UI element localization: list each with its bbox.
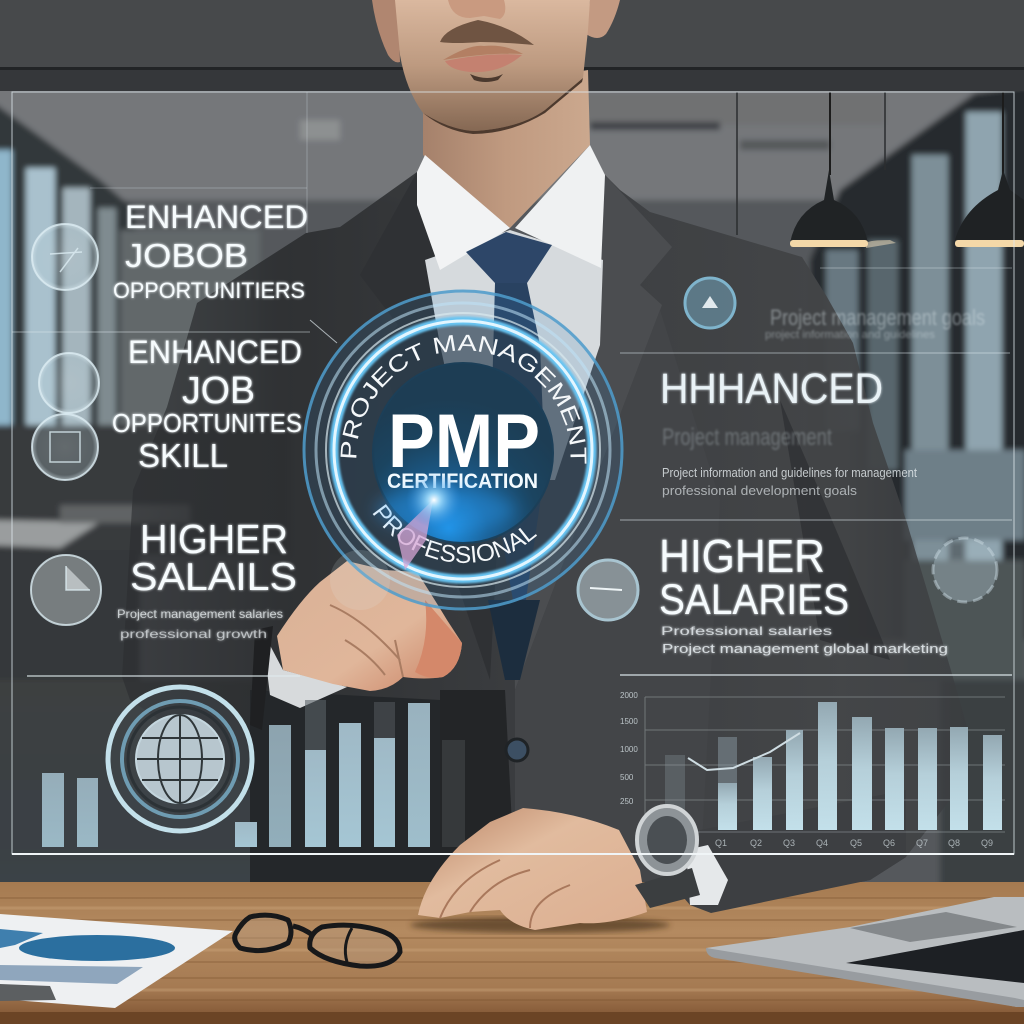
document papers bbox=[0, 914, 233, 1008]
right icons bbox=[578, 278, 997, 620]
left text: enhanced job opportunities top bbox=[113, 199, 308, 303]
right bar chart: Q3 bbox=[783, 838, 795, 848]
right bar chart: Q8 bbox=[948, 838, 960, 848]
eyeglasses bbox=[235, 915, 400, 966]
left text: enhanced job opportunities top: JOBOB bbox=[125, 237, 248, 274]
right heading: enhanced bbox=[660, 365, 917, 498]
right heading: enhanced: Project management bbox=[662, 424, 832, 451]
PMP certification badge: PROJECT MANAGEMENT bbox=[340, 334, 586, 464]
left text: enhanced job opportunities skill bbox=[112, 334, 302, 474]
PMP certification badge bbox=[302, 290, 624, 610]
right heading: enhanced: HHHANCED bbox=[660, 365, 883, 413]
left chart floor strip and cuff bbox=[250, 626, 347, 730]
left text: enhanced job opportunities skill: JOB bbox=[182, 370, 255, 412]
right heading: higher salaries bbox=[659, 530, 948, 656]
left text: higher salaries bbox=[117, 516, 297, 641]
right faint scribble text bbox=[765, 305, 985, 341]
man: pointing hand bbox=[277, 561, 462, 691]
PMP certification badge: PMP bbox=[388, 399, 540, 484]
right faint scribble text: project information and guidelines bbox=[765, 329, 936, 341]
right bar chart: Q6 bbox=[883, 838, 895, 848]
left text: higher salaries: Project management salaries bbox=[117, 607, 283, 621]
left text: enhanced job opportunities skill: OPPORTUNITES bbox=[112, 408, 302, 438]
jacket button bbox=[506, 739, 528, 761]
right heading: enhanced: professional development goals bbox=[662, 483, 858, 498]
right bar chart: Q5 bbox=[850, 838, 862, 848]
left text: enhanced job opportunities top: ENHANCED bbox=[125, 199, 308, 235]
right bar chart: Q1 bbox=[715, 838, 727, 848]
desk shadow under hand bbox=[410, 917, 670, 933]
left text: enhanced job opportunities top: OPPORTUNITIERS bbox=[113, 278, 305, 303]
globe icon bbox=[108, 687, 252, 831]
right heading: higher salaries: SALARIES bbox=[659, 576, 849, 624]
right faint scribble text: Project management goals bbox=[770, 305, 985, 330]
man: resting hand and sleeve bbox=[418, 806, 906, 930]
wooden desk bbox=[0, 882, 1024, 1024]
right bar chart: 500 bbox=[620, 773, 634, 782]
right bar chart: Q9 bbox=[981, 838, 993, 848]
man: suit jacket bbox=[122, 172, 968, 913]
left text: higher salaries: professional growth bbox=[120, 627, 267, 641]
PMP certification badge: PROFESSIONAL bbox=[372, 504, 537, 564]
laptop bbox=[706, 897, 1024, 1007]
man: shirt collar and tie bbox=[417, 145, 605, 680]
pendant lamps bbox=[790, 92, 1024, 248]
right heading: higher salaries: Project management global marketing bbox=[662, 641, 948, 656]
concrete wall top band bbox=[0, 0, 1024, 91]
right bar chart bbox=[620, 691, 1005, 848]
left circular icons bbox=[31, 224, 101, 625]
right heading: higher salaries: Professional salaries bbox=[661, 624, 832, 638]
right heading: higher salaries: HIGHER bbox=[659, 530, 825, 582]
PMP certification badge: CERTIFICATION bbox=[387, 470, 538, 493]
glass frame bottom over hand bbox=[12, 853, 1014, 855]
right bar chart: 250 bbox=[620, 797, 634, 806]
man: neck and head bbox=[372, 0, 620, 228]
right bar chart: 2000 bbox=[620, 691, 638, 700]
right bar chart: 1000 bbox=[620, 745, 638, 754]
dark wall line verticals bbox=[737, 92, 885, 235]
right bar chart: Q2 bbox=[750, 838, 762, 848]
left bar chart bbox=[42, 700, 465, 847]
left text: higher salaries: SALAILS bbox=[130, 556, 297, 599]
left text: enhanced job opportunities skill: SKILL bbox=[138, 437, 228, 474]
glass panel outlines bbox=[12, 92, 1014, 854]
right heading: enhanced: Project information and guidelines for management bbox=[662, 465, 917, 480]
right bar chart: Q7 bbox=[916, 838, 928, 848]
left text: enhanced job opportunities skill: ENHANCED bbox=[128, 334, 302, 370]
right bar chart: Q4 bbox=[816, 838, 828, 848]
right bar chart: 1500 bbox=[620, 717, 638, 726]
left text: higher salaries: HIGHER bbox=[140, 516, 288, 562]
